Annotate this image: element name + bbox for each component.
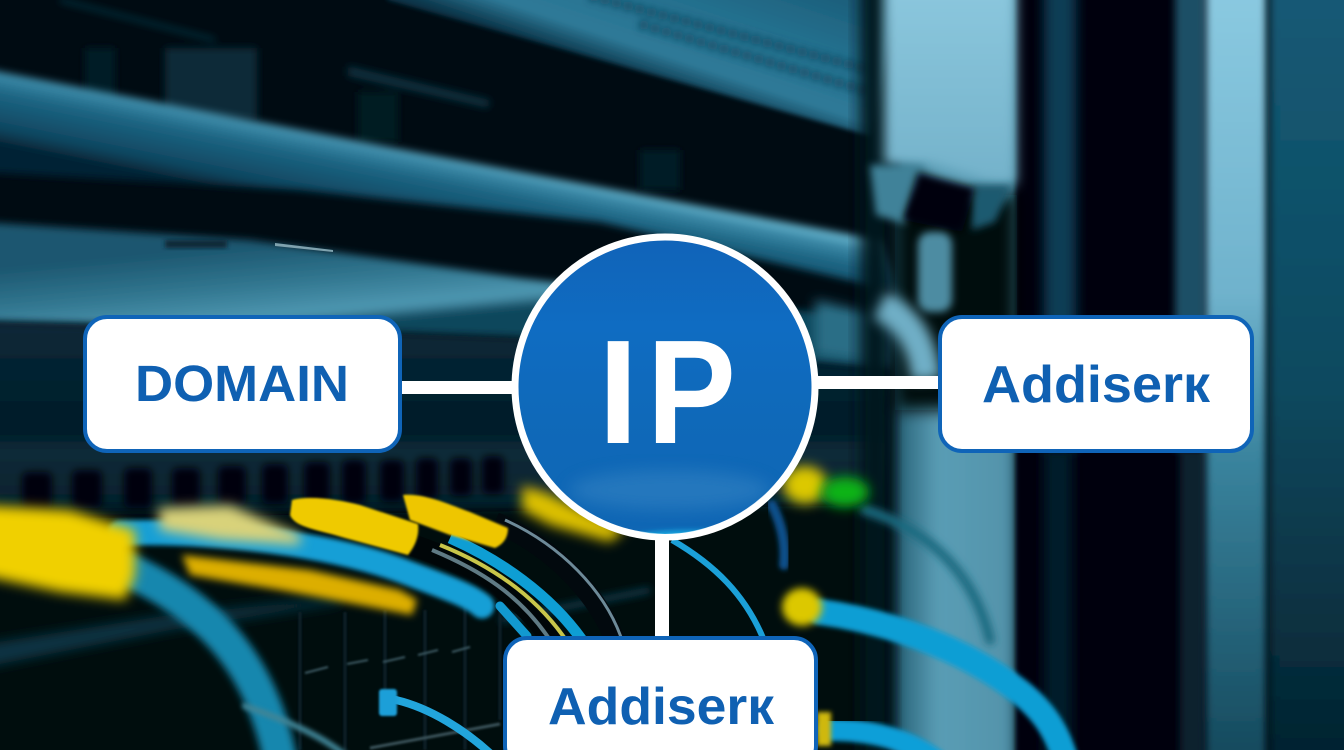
faint objects in the dark gap xyxy=(60,0,680,190)
yellow connectors xyxy=(0,466,869,746)
white bracket top right xyxy=(870,0,1017,410)
label box: DOMAIN: DOMAIN xyxy=(135,355,349,412)
label box: bottom Addiserk xyxy=(505,638,816,750)
label box: right Addiserk: Addiserк xyxy=(982,356,1211,414)
port row xyxy=(22,456,504,510)
top shelf with vent grating xyxy=(380,0,900,136)
label box: right Addiserk xyxy=(940,317,1252,451)
central circle: IP: I xyxy=(598,310,638,475)
second shelf band xyxy=(0,68,900,292)
central circle: IP xyxy=(515,237,815,546)
right rack columns xyxy=(860,0,1344,750)
mid dark panel xyxy=(0,322,890,520)
blue cables xyxy=(120,505,1068,750)
central circle: IP: P xyxy=(647,310,736,475)
label box: bottom Addiserk: Addiserк xyxy=(548,678,775,736)
third shelf band xyxy=(0,222,900,370)
connector lines xyxy=(398,376,940,640)
label box: DOMAIN xyxy=(85,317,400,451)
lower grid panel xyxy=(0,505,880,750)
